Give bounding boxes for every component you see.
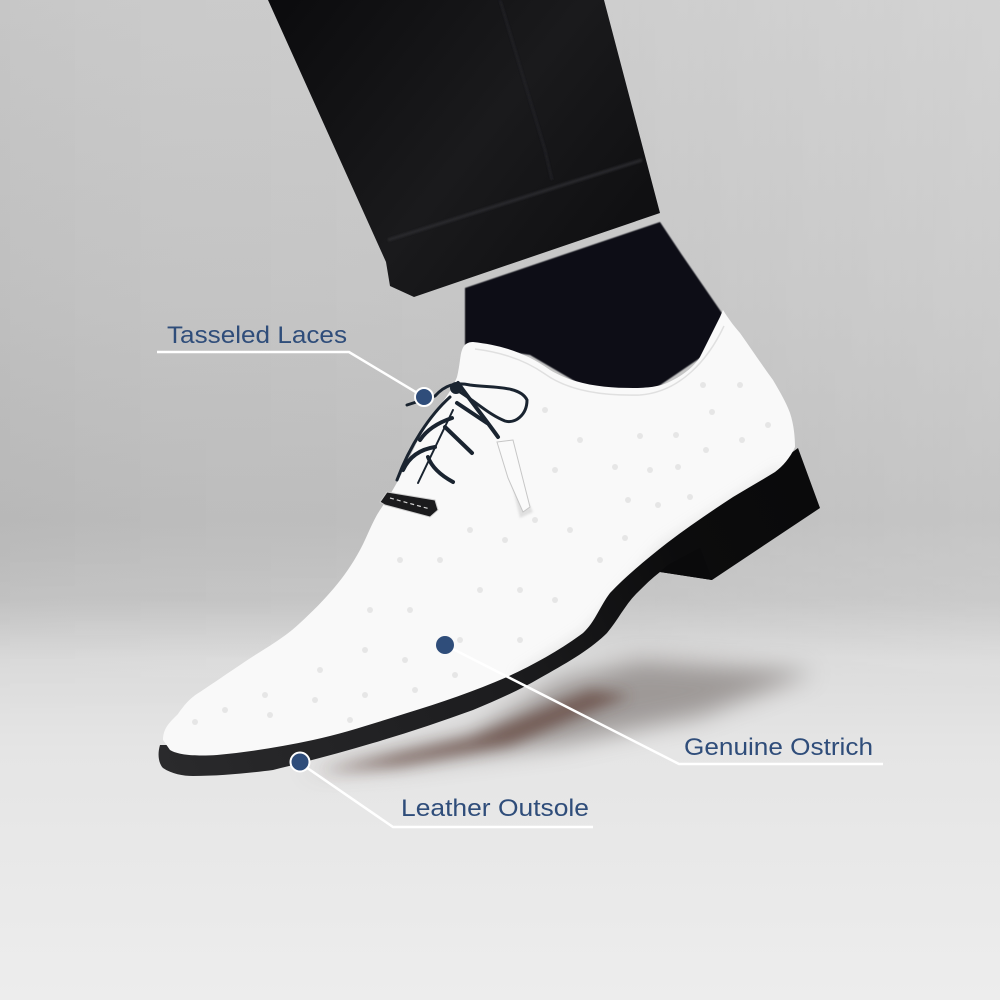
shoe upper: ostrich leather <box>163 310 795 755</box>
callout: Leather Outsole <box>290 752 593 827</box>
callout: Leather Outsole: Leather Outsole <box>401 795 589 822</box>
callout: Genuine Ostrich: Genuine Ostrich <box>684 734 873 761</box>
trouser leg <box>268 0 660 297</box>
floor shadow <box>300 660 815 772</box>
leather shading <box>475 326 785 680</box>
ostrich quill bumps <box>192 382 771 725</box>
laces <box>397 382 527 483</box>
sock <box>465 222 724 392</box>
tassel tip <box>497 440 533 518</box>
callout: Genuine Ostrich <box>436 636 883 764</box>
sole and heel <box>159 448 820 776</box>
callout: Tasseled Laces: Tasseled Laces <box>167 322 347 349</box>
lace bar ornament <box>380 492 438 517</box>
callout: Tasseled Laces <box>157 322 433 406</box>
